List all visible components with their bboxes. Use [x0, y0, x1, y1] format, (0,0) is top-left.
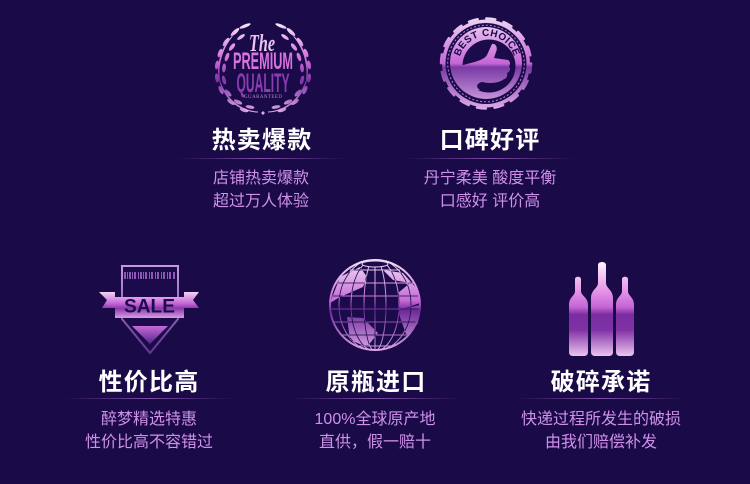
text: 破碎承诺 description [521, 410, 681, 451]
text: 热卖爆款 description [213, 169, 309, 210]
icon: premium quality wreath badge: PREMIUM [233, 48, 293, 75]
divider: 破碎承诺 [516, 398, 686, 399]
icon: premium quality wreath badge [214, 22, 312, 115]
divider: 热卖爆款 [177, 158, 347, 159]
text: 破碎承诺 description: 由我们赔偿补发 [545, 434, 657, 451]
text: 破碎承诺 description: 快递过程所发生的破损 [521, 411, 681, 428]
icon: three wine bottles [569, 262, 634, 356]
icon: best choice thumbs-up seal [440, 17, 532, 110]
text: 热卖爆款 description: 店铺热卖爆款 [213, 170, 309, 187]
heading: 性价比高: 性价比高 [99, 369, 199, 396]
heading: 口碑好评: 口碑好评 [440, 127, 540, 154]
icon: premium quality wreath badge: QUALITY [236, 68, 290, 98]
text: 性价比高 description [85, 410, 213, 451]
icon: best choice thumbs-up seal: BEST CHOICE [454, 29, 520, 56]
icon: premium quality wreath badge: GUARANTEED [244, 95, 282, 100]
heading: 破碎承诺: 破碎承诺 [551, 369, 651, 396]
heading: 热卖爆款: 热卖爆款 [212, 127, 312, 154]
text: 口碑好评 description [424, 169, 556, 210]
icon: sale tag [99, 266, 199, 353]
icon: sale tag: SALE [124, 296, 175, 318]
text: 原瓶进口 description [315, 410, 435, 451]
divider: 口碑好评 [405, 158, 575, 159]
text: 原瓶进口 description: 100%全球原产地 [315, 411, 435, 428]
heading: 原瓶进口: 原瓶进口 [326, 369, 426, 396]
text: 原瓶进口 description: 直供，假一赔十 [319, 434, 431, 451]
icon: premium quality wreath badge: The [249, 31, 275, 57]
text: 口碑好评 description: 口感好 评价高 [440, 193, 540, 210]
icon: globe [329, 259, 421, 351]
text: 口碑好评 description: 丹宁柔美 酸度平衡 [424, 170, 556, 187]
text: 性价比高 description: 性价比高不容错过 [85, 434, 213, 451]
divider: 性价比高 [64, 398, 234, 399]
text: 热卖爆款 description: 超过万人体验 [213, 193, 309, 210]
text: 性价比高 description: 醉梦精选特惠 [101, 411, 197, 428]
divider: 原瓶进口 [291, 398, 461, 399]
